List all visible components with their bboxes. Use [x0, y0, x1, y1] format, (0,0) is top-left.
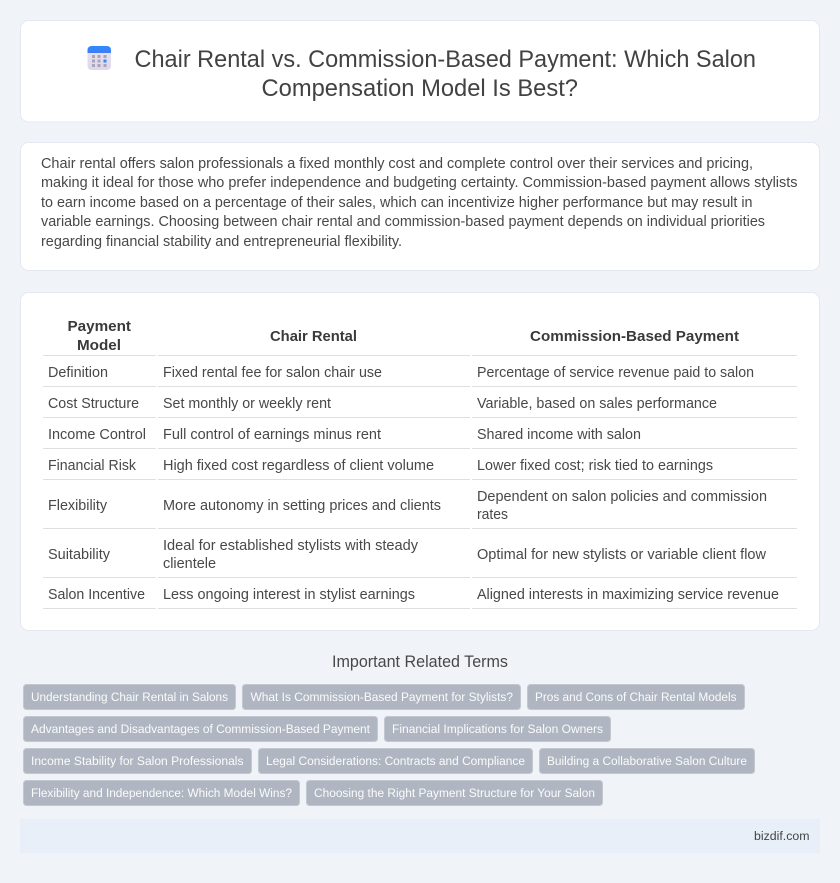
footer bar: [20, 819, 820, 853]
row: flexibility: [48, 489, 767, 523]
row: suitability: Ideal for established stylists with steady: [163, 538, 419, 554]
tag: Choosing the Right Payment Structure for Your Salon: [314, 786, 595, 800]
row: income control: [48, 427, 641, 443]
row: cost structure: Cost Structure: [48, 396, 139, 412]
heading: Chair Rental vs. Commission-Based Payment: Which Salon: [134, 46, 756, 73]
icon: calendar: [88, 46, 111, 70]
row: definition: Percentage of service revenue paid to salon: [477, 365, 754, 381]
tag: [24, 780, 300, 806]
tag: What Is Commission-Based Payment for Stylists?: [250, 690, 513, 704]
tag: [528, 684, 744, 710]
tag: Flexibility and Independence: Which Model Wins?: [31, 786, 292, 800]
row: cost structure: Set monthly or weekly rent: [163, 396, 331, 412]
text block: summary: variable earnings. Choosing between chair rental and commission-based payment depends on individual priorities: [41, 214, 765, 230]
text block: summary: Chair rental offers salon professionals a fixed monthly cost and complete control over their services and pricing,: [41, 156, 753, 172]
tag: [24, 684, 236, 710]
text block: summary: regarding financial stability and entrepreneurial flexibility.: [41, 234, 402, 250]
row: financial risk: Lower fixed cost; risk tied to earnings: [477, 458, 713, 474]
panel: description: [20, 142, 820, 270]
tag: Understanding Chair Rental in Salons: [31, 690, 228, 704]
row: suitability: [48, 538, 767, 572]
table header: Payment: [68, 319, 131, 335]
tag: Advantages and Disadvantages of Commission-Based Payment: [31, 722, 371, 736]
text block: summary: making it ideal for those who prefer independence and budgeting certainty. Commission-based payment allows stylists: [41, 175, 798, 191]
tag list: related terms: [24, 684, 754, 806]
tag: [384, 716, 610, 742]
tag: Building a Collaborative Salon Culture: [547, 754, 747, 768]
row: suitability: Optimal for new stylists or variable client flow: [477, 547, 767, 563]
tag: [306, 780, 602, 806]
row: financial risk: High fixed cost regardless of client volume: [163, 458, 434, 474]
row: flexibility: Flexibility: [48, 498, 108, 514]
row: cost structure: [48, 396, 717, 412]
tag: [24, 748, 252, 774]
row: salon incentive: Aligned interests in maximizing service revenue: [477, 587, 779, 603]
heading: [134, 46, 756, 102]
table header: Model: [77, 338, 121, 354]
table header: Commission-Based Payment: [530, 329, 739, 345]
row: salon incentive: [48, 587, 779, 603]
row: definition: [48, 365, 754, 381]
row: flexibility: Dependent on salon policies and commission: [477, 489, 767, 505]
row: salon incentive: Less ongoing interest in stylist earnings: [163, 587, 415, 603]
text block: summary: to earn income based on a percentage of their sales, which can incentivize higher performance but may result in: [41, 195, 752, 211]
tag: Financial Implications for Salon Owners: [392, 722, 603, 736]
row: flexibility: rates: [477, 507, 508, 523]
row: flexibility: More autonomy in setting prices and clients: [163, 498, 441, 514]
row: income control: Income Control: [48, 427, 146, 443]
row: cost structure: Variable, based on sales performance: [477, 396, 717, 412]
tag: [258, 748, 532, 774]
table header: Chair Rental: [270, 329, 357, 345]
tag: [24, 716, 378, 742]
row: income control: Shared income with salon: [477, 427, 641, 443]
tag: Pros and Cons of Chair Rental Models: [535, 690, 736, 704]
row: suitability: Suitability: [48, 547, 111, 563]
footer source: bizdif.com: [754, 829, 810, 843]
heading: Compensation Model Is Best?: [262, 75, 578, 102]
row: financial risk: [48, 458, 713, 474]
table header: [68, 319, 739, 354]
tag: [242, 684, 520, 710]
panel: title: [20, 20, 820, 122]
row: salon incentive: Salon Incentive: [48, 587, 145, 603]
row: income control: Full control of earnings minus rent: [163, 427, 381, 443]
tag: [540, 748, 754, 774]
row: financial risk: Financial Risk: [48, 458, 137, 474]
text block: summary: [41, 156, 798, 250]
row: definition: Fixed rental fee for salon chair use: [163, 365, 382, 381]
row: suitability: clientele: [163, 556, 216, 572]
tag: Income Stability for Salon Professionals: [31, 754, 244, 768]
heading: related terms: Important Related Terms: [332, 653, 508, 671]
tag: Legal Considerations: Contracts and Compliance: [266, 754, 525, 768]
row: definition: Definition: [48, 365, 108, 381]
panel: comparison table: [20, 292, 820, 630]
